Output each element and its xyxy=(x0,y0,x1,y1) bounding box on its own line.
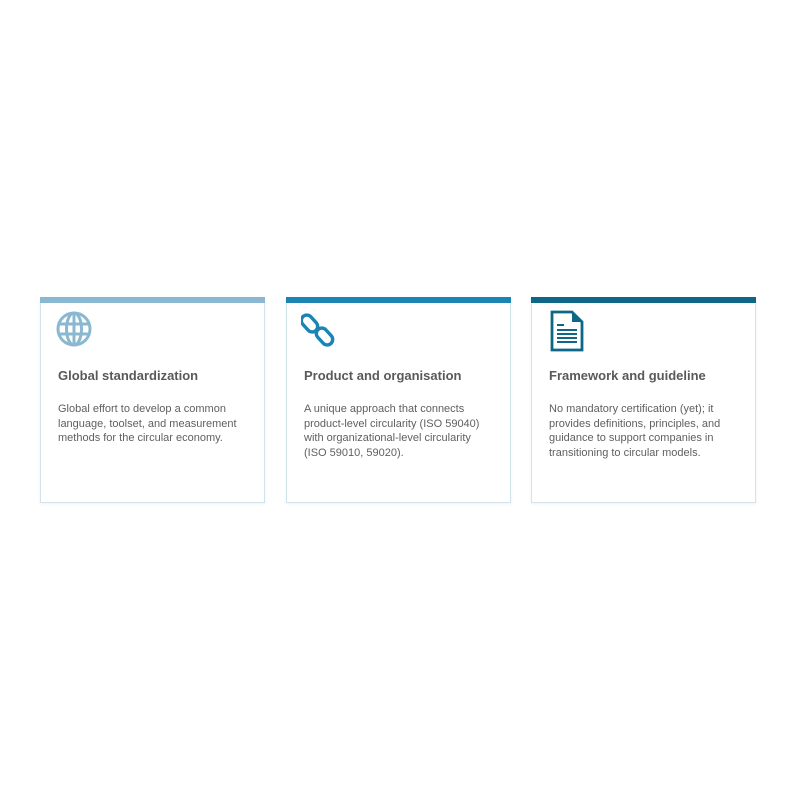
card: global standardization xyxy=(40,297,265,503)
title: Framework and guideline xyxy=(549,368,706,383)
icon: document xyxy=(550,310,584,352)
body text: No mandatory certification (yet); it provides definitions, principles, and guidance to support companies in transitioning to circular models. xyxy=(549,403,720,459)
title: Product and organisation xyxy=(304,368,461,383)
body text: A unique approach that connects product-level circularity (ISO 59040) with organizational-level circularity (ISO 59010, 59020). xyxy=(304,403,479,459)
icon: globe xyxy=(56,312,92,346)
card: framework and guideline xyxy=(531,297,756,503)
body text: Global effort to develop a common language, toolset, and measurement methods for the circular economy. xyxy=(58,403,237,444)
title: Global standardization xyxy=(58,368,198,383)
icon: chain link xyxy=(301,313,334,347)
card: product and organisation xyxy=(286,297,511,503)
